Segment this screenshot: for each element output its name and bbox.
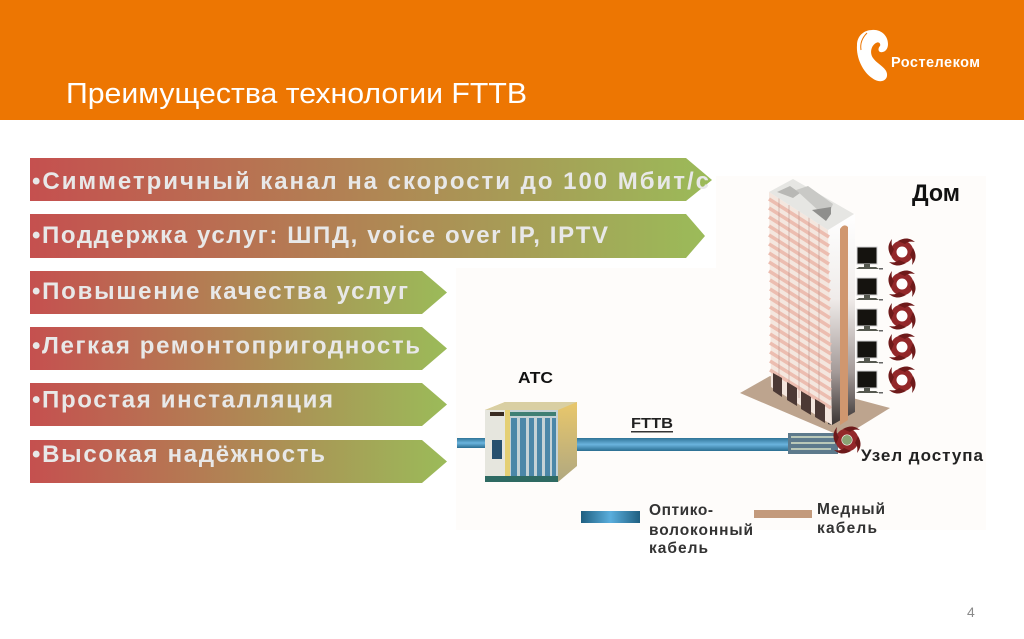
arrow bar 3: •Повышение качества услуг: [32, 278, 408, 305]
logo: Ростелеком: [857, 30, 980, 81]
label: Узел доступа: Узел доступа: [861, 446, 984, 465]
access node: [788, 426, 861, 454]
arrow bar 4: •Легкая ремонтопригодность: [32, 332, 420, 360]
monitors column: [856, 247, 883, 394]
building: [740, 179, 890, 437]
title: Преимущества технологии FTTB: [66, 78, 527, 110]
legend: copper cable: [754, 501, 890, 537]
arrow bar 3: [30, 271, 447, 314]
legend: fibre cable: кабель: [649, 540, 708, 557]
arrow bar 1: •Симметричный канал на скорости до 100 Мбит/с: [32, 168, 709, 195]
legend: fibre cable: [581, 502, 758, 557]
ATC equipment cabinet: [485, 402, 577, 482]
arrow bar 2: [30, 214, 705, 258]
legend: fibre cable: волоконный: [649, 522, 753, 539]
fibre cable FTTB: [457, 438, 790, 451]
icons: subscriber swirls: [888, 238, 916, 394]
arrow bar 2: •Поддержка услуг: ШПД, voice over IP, IPTV: [32, 222, 608, 249]
legend: copper cable: кабель: [817, 520, 877, 537]
logo: Ростелеком: Ростелеком: [891, 55, 980, 71]
arrow bar 6: •Высокая надёжность: [32, 441, 325, 468]
arrow bar 4: [30, 327, 447, 370]
arrow bar 6: [30, 440, 447, 483]
label: Дом: Дом: [912, 180, 960, 207]
legend: fibre cable: Оптико-: [649, 502, 713, 519]
header band: [0, 0, 1024, 120]
legend: copper cable: Медный: [817, 501, 885, 518]
label: АТС: АТС: [518, 370, 553, 387]
arrow bar 1: [30, 158, 712, 201]
arrow bar 5: •Простая инсталляция: [32, 386, 333, 414]
diagram backdrop: [456, 176, 986, 530]
arrow bar 5: [30, 383, 447, 426]
label: FTTB: FTTB: [631, 415, 673, 432]
page number: 4: [967, 604, 975, 620]
